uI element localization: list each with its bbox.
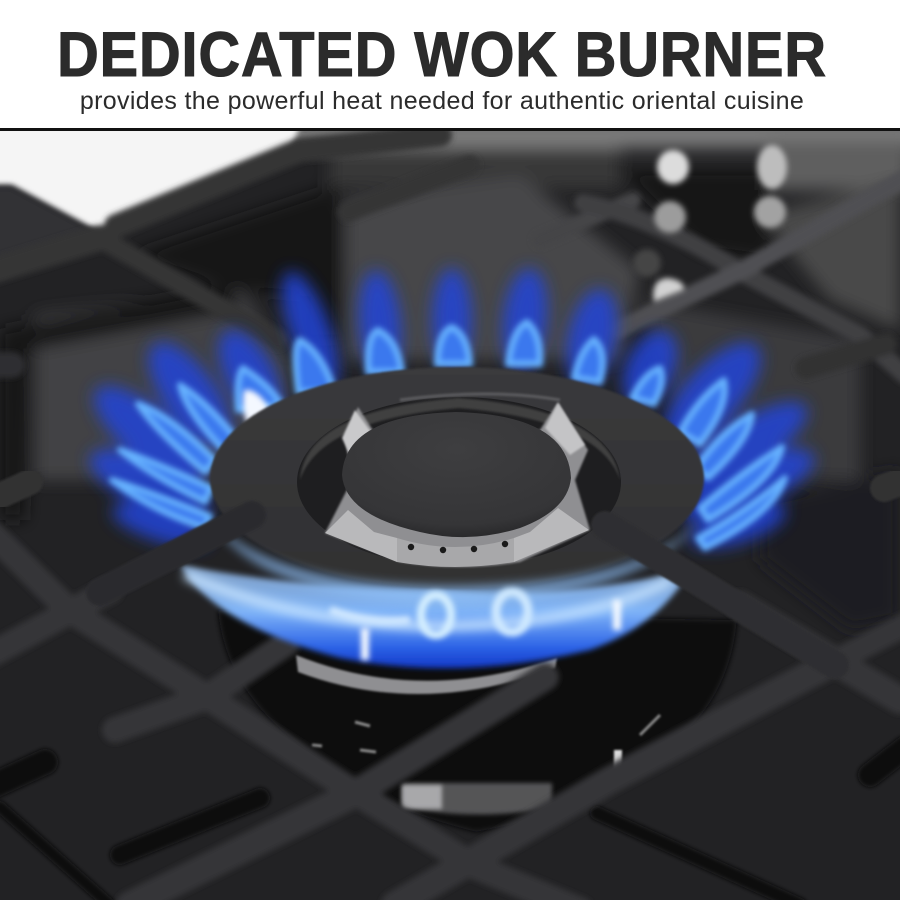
foreground grid bars (0, 532, 900, 900)
lower pan slots (0, 748, 900, 900)
left support finger (100, 515, 252, 592)
upper-left corner slab (0, 187, 100, 278)
subtitle: provides the powerful heat needed for authentic oriental cuisine (80, 87, 804, 115)
lower flame band (180, 565, 690, 668)
title: DEDICATED WOK BURNER (57, 20, 827, 90)
background tones (0, 120, 900, 630)
background worktop (0, 125, 300, 232)
out-of-focus control knobs (633, 145, 787, 302)
upper pan supports (0, 135, 900, 375)
flame halos (80, 265, 824, 558)
right support finger (605, 525, 835, 665)
burner body (218, 610, 737, 832)
burner cap (342, 412, 571, 537)
header rule (0, 128, 900, 131)
blue glow on ring lip (212, 520, 700, 604)
burner crown (325, 402, 590, 567)
flame cores (112, 322, 785, 548)
side finger stubs (0, 480, 900, 498)
flame reflection details (330, 592, 617, 660)
wok ring (210, 367, 704, 604)
white flame highlight (243, 390, 270, 432)
